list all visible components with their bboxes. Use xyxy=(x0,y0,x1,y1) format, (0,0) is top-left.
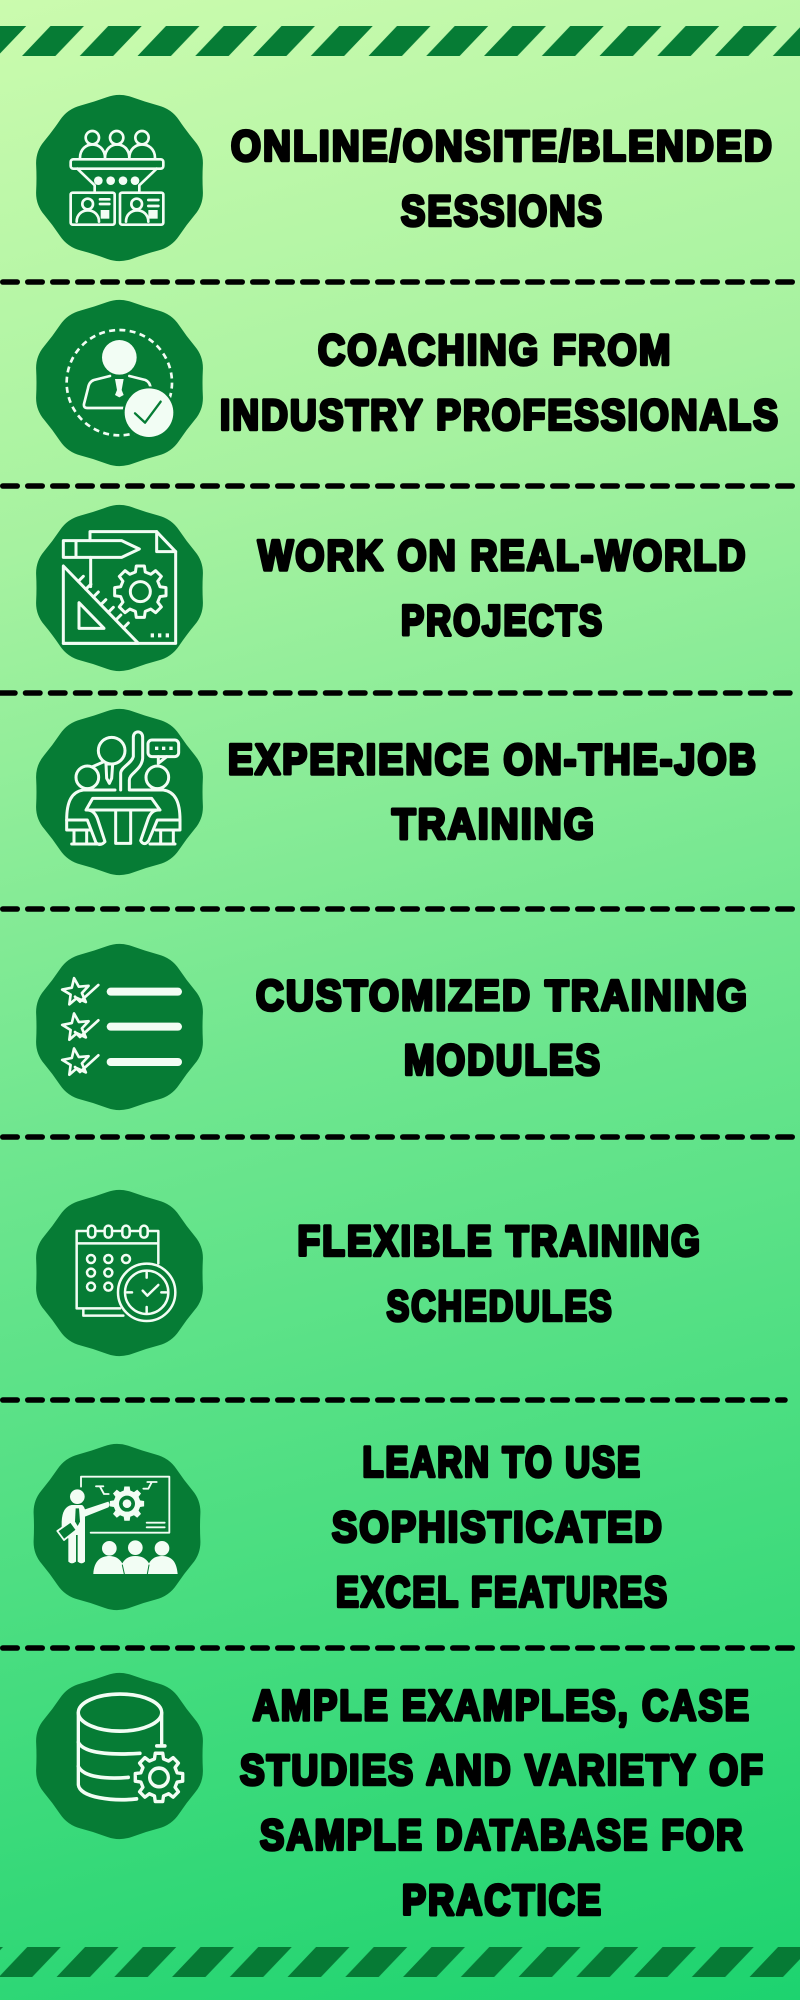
heading: coaching from industry professionals xyxy=(220,327,780,439)
icon: team meeting at table xyxy=(36,709,203,875)
heading: learn to use sophisticated excel features: LEARN TO USE xyxy=(362,1439,642,1486)
panel: learn to use sophisticated excel features xyxy=(34,1439,669,1616)
panel: coaching from industry professionals xyxy=(36,300,780,466)
heading: ample examples, case studies xyxy=(240,1683,765,1924)
heading: flexible training schedules: SCHEDULES xyxy=(387,1283,614,1330)
heading: customized training modules: MODULES xyxy=(404,1037,602,1084)
heading: coaching from industry professionals: COACHING FROM xyxy=(318,327,672,374)
heading: customized training modules: CUSTOMIZED TRAINING xyxy=(256,973,749,1020)
panel: experience on-the-job training xyxy=(36,709,758,875)
heading: experience on-the-job training: TRAINING xyxy=(392,801,596,848)
heading: learn to use sophisticated excel features: SOPHISTICATED xyxy=(332,1504,664,1551)
heading: work on real-world projects: PROJECTS xyxy=(401,598,604,645)
panel: customized training modules xyxy=(36,944,749,1110)
icon: webinar audience and screens xyxy=(36,95,203,261)
heading: ample examples, case studies: PRACTICE xyxy=(402,1877,603,1924)
heading: online onsite blended sessions: SESSIONS xyxy=(401,188,604,235)
heading: online onsite blended sessions xyxy=(231,123,774,235)
heading: learn to use sophisticated excel features xyxy=(332,1439,669,1616)
icon: blueprint with pencil, ruler and gear xyxy=(36,505,203,671)
panel: work on real-world projects xyxy=(36,505,748,671)
panel: flexible training schedules xyxy=(36,1190,702,1356)
icon: presenter with board and audience xyxy=(34,1444,200,1610)
icon: coach with check mark xyxy=(36,300,203,466)
panel: ample examples, case studies and sample database xyxy=(36,1673,765,1924)
bottom striped band xyxy=(0,1947,800,1977)
heading: flexible training schedules: FLEXIBLE TRAINING xyxy=(298,1218,702,1265)
icon: star checklist xyxy=(36,944,203,1110)
top striped band xyxy=(0,26,800,56)
heading: learn to use sophisticated excel features: EXCEL FEATURES xyxy=(336,1569,669,1616)
icon: database with gear xyxy=(36,1673,203,1839)
heading: experience on-the-job training xyxy=(228,737,758,848)
heading: customized training modules xyxy=(256,973,749,1084)
heading: work on real-world projects: WORK ON REAL-WORLD xyxy=(258,533,748,580)
heading: work on real-world projects xyxy=(258,533,748,645)
heading: flexible training schedules xyxy=(298,1218,702,1330)
panel: online onsite blended sessions xyxy=(36,95,774,261)
icon: calendar and clock xyxy=(36,1190,203,1356)
